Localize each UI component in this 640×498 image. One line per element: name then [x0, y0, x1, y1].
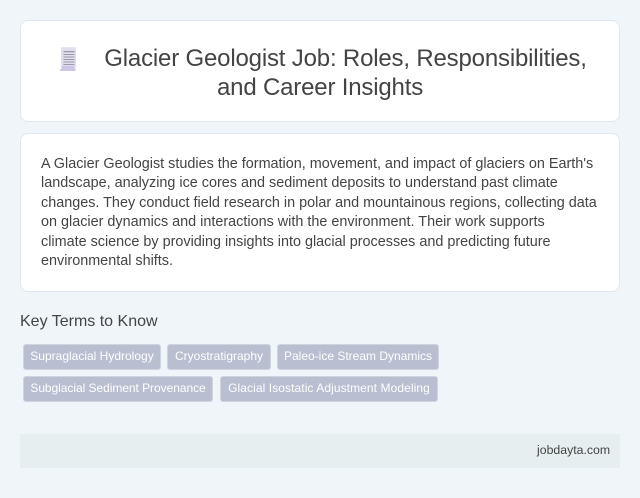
icon: document scroll — [59, 47, 76, 71]
tag — [277, 344, 439, 370]
title — [104, 45, 587, 101]
tag: Glacial Isostatic Adjustment Modeling — [228, 381, 430, 395]
tag — [220, 376, 438, 402]
tag: Cryostratigraphy — [175, 349, 263, 363]
title: and Career Insights — [217, 74, 423, 101]
heading: key terms: Key Terms to Know — [20, 313, 158, 330]
description text: environmental shifts. — [41, 253, 173, 269]
footer bar — [20, 434, 620, 468]
description text: climate science by providing insights into glacial processes and predicting future — [41, 234, 551, 250]
description text: A Glacier Geologist studies the formation, movement, and impact of glaciers on Earth's — [41, 156, 593, 172]
tag — [23, 376, 213, 402]
description text: changes. They conduct field research in polar and mountainous regions, collecting data — [41, 195, 597, 211]
description text: on glacier dynamics and interactions with the environment. Their work supports — [41, 214, 545, 230]
footer text: jobdayta.com — [537, 443, 610, 457]
panel: title card — [20, 20, 620, 122]
tag: Subglacial Sediment Provenance — [30, 381, 206, 395]
title: Glacier Geologist Job: Roles, Responsibilities, — [104, 45, 587, 72]
description text: landscape, analyzing ice cores and sediment deposits to understand past climate — [41, 175, 558, 191]
tag: Paleo-ice Stream Dynamics — [284, 349, 432, 363]
panel: description card — [20, 133, 620, 292]
tag group — [23, 344, 439, 402]
tag: Supraglacial Hydrology — [30, 349, 154, 363]
tag — [167, 344, 271, 370]
description text — [41, 156, 597, 269]
tag — [23, 344, 161, 370]
